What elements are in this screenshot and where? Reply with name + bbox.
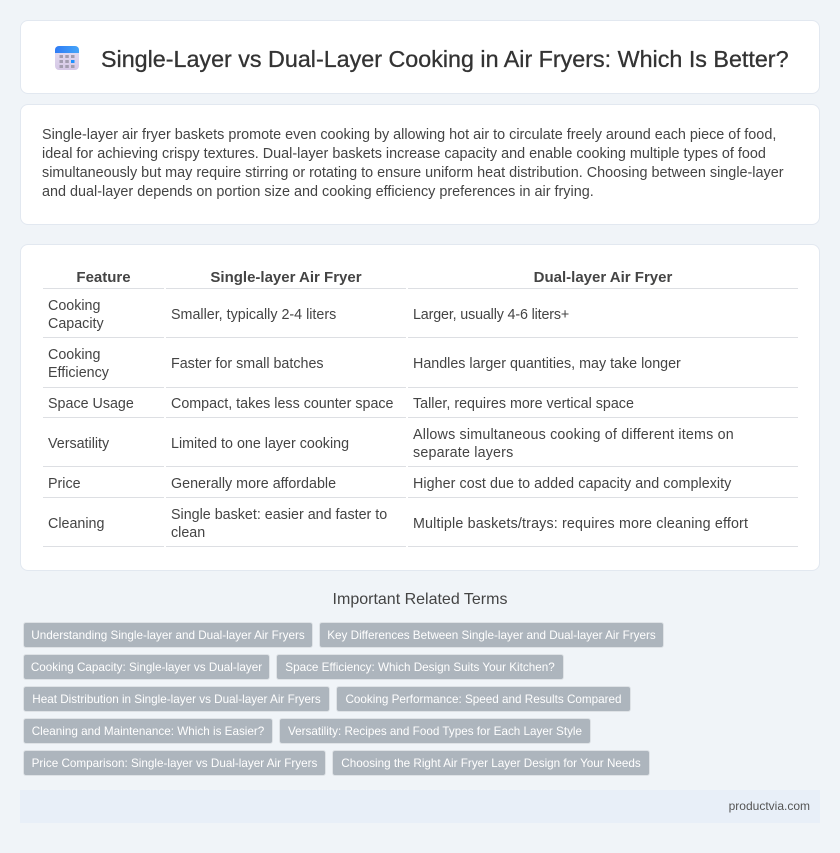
intro text: ideal for achieving crispy textures. Dual-layer baskets increase capacity and enable cooking multiple types of food — [42, 146, 766, 162]
related terms tags: Versatility: Recipes and Food Types for Each Layer Style — [288, 725, 582, 738]
table rows: Cleaning — [48, 516, 104, 532]
table rows: Taller, requires more vertical space — [413, 396, 634, 412]
table rows: Versatility — [48, 436, 109, 452]
table rows: Larger, usually 4-6 liters+ — [413, 307, 569, 323]
intro panel — [20, 104, 820, 225]
table header — [76, 269, 672, 286]
footer brand: productvia.com — [729, 799, 810, 813]
table rows: Single basket: easier and faster to — [171, 507, 387, 523]
related terms tags: Choosing the Right Air Fryer Layer Design for Your Needs — [341, 757, 641, 770]
title panel — [20, 20, 820, 94]
intro text: Single-layer air fryer baskets promote even cooking by allowing hot air to circulate freely around each piece of food, — [42, 126, 776, 142]
table rows — [43, 288, 798, 547]
table rows: Compact, takes less counter space — [171, 396, 394, 412]
table rows: Space Usage — [48, 396, 134, 412]
related terms tags: Cooking Capacity: Single-layer vs Dual-layer — [31, 661, 262, 674]
comparison table panel — [20, 244, 820, 571]
table rows: Price — [48, 476, 81, 492]
intro text — [42, 126, 784, 200]
table rows: Handles larger quantities, may take longer — [413, 356, 681, 372]
table rows: Cooking — [48, 347, 100, 363]
table rows: Multiple baskets/trays: requires more cleaning effort — [413, 516, 748, 532]
table rows: Efficiency — [48, 365, 109, 381]
table rows: Cooking — [48, 298, 100, 314]
related terms tags: Cleaning and Maintenance: Which is Easier? — [32, 725, 264, 738]
table rows: Faster for small batches — [171, 356, 324, 372]
title: Single-Layer vs Dual-Layer Cooking in Air Fryers: Which Is Better? — [101, 46, 789, 72]
related terms heading: Important Related Terms — [333, 591, 507, 608]
table rows: Limited to one layer cooking — [171, 436, 349, 452]
table header: Feature — [76, 269, 131, 286]
table header: Dual-layer Air Fryer — [534, 269, 672, 286]
table rows: Higher cost due to added capacity and complexity — [413, 476, 731, 492]
intro text: and dual-layer depends on portion size and cooking efficiency preferences in air frying. — [42, 184, 594, 200]
icon: calendar — [55, 46, 79, 70]
related terms tags: Key Differences Between Single-layer and Dual-layer Air Fryers — [327, 629, 656, 642]
table rows: Capacity — [48, 316, 104, 332]
related terms tags: Space Efficiency: Which Design Suits Your Kitchen? — [285, 661, 555, 674]
table rows: Generally more affordable — [171, 476, 336, 492]
related terms tags: Understanding Single-layer and Dual-layer Air Fryers — [31, 629, 305, 642]
related terms tags: Heat Distribution in Single-layer vs Dual-layer Air Fryers — [32, 693, 321, 706]
table rows: separate layers — [413, 445, 513, 461]
intro text: simultaneously but may require stirring or rotating to ensure uniform heat distribution. Choosing between single-layer — [42, 165, 784, 181]
table rows: Smaller, typically 2-4 liters — [171, 307, 336, 323]
table rows: clean — [171, 525, 205, 541]
related terms tags — [23, 622, 664, 776]
related terms tags: Price Comparison: Single-layer vs Dual-layer Air Fryers — [32, 757, 317, 770]
table rows: Allows simultaneous cooking of different items on — [413, 427, 734, 443]
related terms tags: Cooking Performance: Speed and Results Compared — [345, 693, 622, 706]
footer — [20, 790, 820, 823]
table header: Single-layer Air Fryer — [210, 269, 362, 286]
